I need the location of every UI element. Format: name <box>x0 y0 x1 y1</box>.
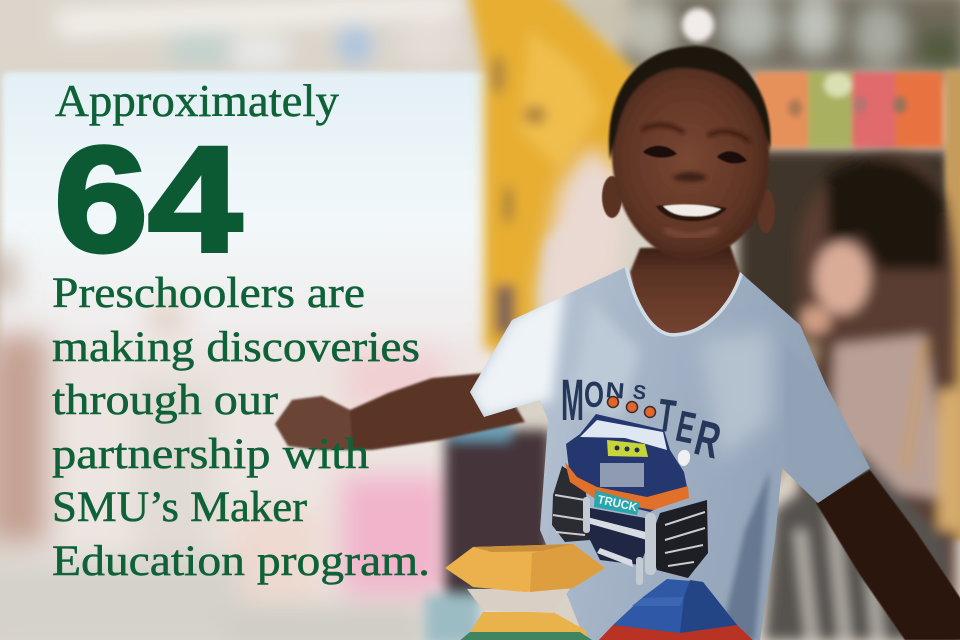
truck cab and body <box>566 414 688 512</box>
eyebrows <box>642 125 750 142</box>
eyes <box>643 146 747 163</box>
big number: 64 <box>54 115 242 283</box>
body text <box>52 270 430 585</box>
white backdrop <box>2 72 492 372</box>
nose <box>672 172 708 182</box>
body text: Preschoolers are <box>52 270 365 317</box>
truck roof lights <box>608 396 656 418</box>
stacking toy: blue and red pyramid <box>597 579 755 640</box>
smile <box>656 204 727 221</box>
shirt lettering: O <box>584 374 604 415</box>
heading: approximately: Approximately <box>55 75 339 126</box>
body text: through our <box>52 377 278 424</box>
shirt lettering: N <box>605 377 626 404</box>
stacking toy: yellow <box>445 544 605 640</box>
yellow banner <box>467 0 640 350</box>
body text: Education program. <box>52 538 430 585</box>
shirt lettering: M <box>561 368 584 433</box>
body text: SMU’s Maker <box>52 484 307 531</box>
text block <box>52 75 430 585</box>
shirt lettering <box>561 368 726 469</box>
body text: partnership with <box>52 431 369 478</box>
shirt lettering: E <box>672 402 700 454</box>
shirt lettering: R <box>689 409 726 469</box>
tires <box>552 466 590 542</box>
t-shirt <box>460 260 880 640</box>
right arm <box>816 470 960 640</box>
blurred child in the background <box>765 155 960 640</box>
shelf and dark alcove <box>738 150 950 350</box>
left arm <box>275 372 525 450</box>
face <box>612 66 769 259</box>
shirt graphic: monster truck <box>552 368 726 585</box>
hair <box>609 46 771 160</box>
truck label: TRUCK <box>596 492 639 514</box>
ears <box>602 176 622 218</box>
head <box>602 46 775 259</box>
neck <box>630 245 742 340</box>
shirt lettering: S <box>631 381 648 405</box>
shirt lettering: T <box>655 388 679 442</box>
body text: making discoveries <box>52 324 420 371</box>
boy <box>275 46 960 640</box>
